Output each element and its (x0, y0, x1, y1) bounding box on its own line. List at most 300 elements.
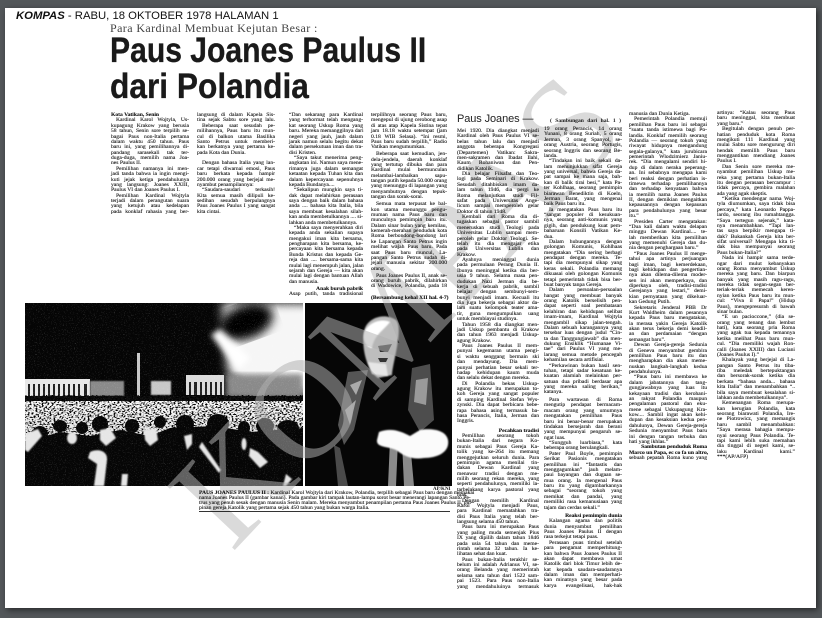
article column 7 (629, 111, 708, 461)
article column 6: golongan Komunis, Kohlhaas (544, 244, 622, 250)
article column 8: “E un pacioccone,” (dia se- (722, 314, 795, 320)
article column 7: nya akan dilema-dilema moder- (629, 272, 707, 278)
article column 6: “Tindakan ini baik sekali da- (549, 158, 622, 164)
article column 4: di atas atap Kapela Sistina tepat (371, 123, 447, 129)
article column 6: Jerman Barat, yang mengenal (544, 196, 622, 202)
article column 6: orang Austria, seorang Portugis, (544, 142, 622, 148)
article column 7: Presiden Carter mengatakan: (634, 218, 707, 224)
article column 5: meneruskan studi Teologi pada (457, 225, 539, 231)
article column 8: nyai seorang Paus Polandia. Te- (717, 432, 795, 438)
article column 6: baharuan Konsili Vatikan Ke- (544, 228, 622, 234)
article column 7: mene sebagai Uskupagung Kra- (629, 407, 707, 413)
article column 6: sebagai “seorang tokoh yang (544, 488, 622, 494)
article column 5: Kardinal oleh Paus Paulus VI se- (457, 133, 539, 139)
article column 3: lahkan anda membetulkannya. (289, 220, 357, 226)
article column 5: lam tahun 1946, dia pergi ke (457, 187, 539, 193)
article column 3: disi Kristen. (289, 150, 316, 156)
article column 6: keras sekali. Polandia memang (544, 266, 622, 272)
article column 6: dapat seperti soal pembatasan (544, 303, 622, 309)
article column 6: kan di balik tirai besi,” kata Pa- (544, 180, 622, 186)
continuation note: ( Sambungan dari hal. 1 ) (550, 118, 621, 124)
article column 5: Paus baru ini merupakan Paus (462, 524, 539, 530)
article column 8: berkata “bahasa anda... bahasa (717, 379, 795, 385)
article column 6: buat banyak tanpa Gereja. (544, 282, 602, 288)
article column 4: 0.18 WIB Selasa). “Ini resmi, (371, 134, 447, 140)
article column 5: anggota beberapa Kongregasi (457, 144, 539, 150)
article column 8: pangan Santo Petrus itu tiba- (717, 363, 795, 369)
article column 6: Dalam hubungannya dengan (549, 239, 622, 245)
article column 6: Jerman, 3 orang Spanyol, se- (544, 137, 622, 143)
article column 1: Pemilihan Kardinal Wojtyla (116, 193, 189, 199)
article column 5: Paus Joanes Paulus II mem- (462, 343, 539, 349)
article column 1: yang ketujuh atau kedelapan (111, 203, 189, 209)
article column 3: “Sekalipun mungkin saya ti- (294, 187, 363, 193)
article column 8: Dan Senin sore mereka me- (722, 164, 795, 170)
article column 7: pemilihan Paus baru itu dan (629, 353, 707, 359)
article column 4: yang menunggu di lapangan yang (371, 183, 447, 189)
article column 3: kat seorang Uskup Roma yang (289, 123, 363, 129)
article column 2: kan berkatnya yang pertama ke- (197, 144, 275, 150)
article column 2: pada Kota dan Dunia. (197, 150, 246, 156)
article column 6: Reaksi pemimpin dunia (565, 513, 622, 519)
article column 7: tahui apa artinya perjuangan (629, 256, 707, 262)
article column 3 (288, 112, 364, 297)
article column 7: itu.” (629, 213, 639, 219)
article column 6: baik Paus baru itu. (544, 201, 586, 207)
article column 8: ne Piotrowicz, yang memangis (717, 416, 795, 422)
article column 6: “sangat populer di kesukuan- (544, 212, 622, 218)
article column 5: koh Gereja yang sangat populer (457, 391, 539, 397)
article column 7: Gerejanya yang lestari,” demi- (629, 288, 707, 294)
article column 4: terpilihnya seorang Paus baru, (371, 112, 447, 118)
article column 7: kian pernyataan yang dikeluar- (629, 294, 707, 300)
article column 5: lam suatu kelompok teater ama- (457, 305, 539, 311)
article column 5: yang mendahuluinya termasuk (457, 584, 539, 590)
article column 6: pendapat dengan mereka. Te- (544, 255, 622, 261)
article column 6: baru itu yang digambarkannya (544, 483, 622, 489)
article column 3: rimanya juga dalam semangat (289, 166, 363, 172)
article column 7: dalam jabatannya dan tang- (629, 380, 707, 386)
article column 6: Ia mengatakan Paus baru itu (549, 207, 622, 213)
article column 3: pengharapan kita bersama, ke- (289, 241, 363, 247)
article column 1: kupagung Krakow yang berusia (111, 123, 189, 129)
article column 7: beri reaksi dengan perhatian is- (629, 176, 707, 182)
article column 5: Roma melanjutkan studi Fil- (457, 192, 539, 198)
article column 6: akan dapat membawa umat (544, 556, 622, 562)
article column 2: Paus Joanes Paulus I yang sangat (197, 203, 275, 209)
article column 2: sedihan sesudah berpulangnya (197, 198, 275, 204)
article column 8: mereka tidak segan-segan ber- (717, 282, 795, 288)
white fur cuffs (377, 429, 448, 459)
article column 6: imam-imam, Kardinal Wojtyla (544, 314, 622, 320)
photo caption: PAUS JOANES PAULUS II : Kardinal Karol Wojtyla dari Krakow, Polandia, terpilih sebagai Paus baru dengan memakai (199, 490, 474, 496)
article column 4: orang buruh pabrik, dilahirkan (371, 278, 447, 284)
article column 6: kuatan alamiah melainkan per- (544, 373, 622, 379)
kicker heading: Para Kardinal Membuat Kejutan Besar : (110, 21, 318, 35)
article column 6: menggagumkan” jauh melam- (544, 467, 622, 473)
article column 5: tarbelakang karya pastoral yang (457, 487, 539, 493)
article column 6: mengatakan “Dia sering berbagi (544, 250, 622, 256)
article column 8: sifat universal? Mengapa kita ti- (717, 239, 795, 245)
photo caption: nama Joanes Paulus II (gambar kanan). Pada gambar kiri tampak lautan-lampu sorot besar menerangi lapangan Santo Pe- (199, 495, 471, 501)
article column 8: dan bersorak-sorak ketika dia (717, 373, 795, 379)
article column 8: bila saya membuat kesalahan si- (717, 390, 795, 396)
article column 6: tapi dia mempunyai sikap yang (544, 260, 622, 266)
article column 8: kan kerugian Polandia, kata (717, 406, 795, 412)
article column 7: pemerintah Wlodzimierz Janiu- (629, 154, 707, 160)
article column 7: pendahulunya. (629, 369, 662, 375)
article column 4: Paus Joanes Paulus II, anak se- (376, 273, 447, 279)
article column 2: Beberapa saat sesudah pe- (202, 123, 275, 129)
article column 6: memikat dan pandai, yang (544, 494, 622, 500)
article column 6 (544, 126, 622, 589)
article column 7: di Geneva menyambut gembira (629, 348, 707, 354)
article column 5: Dia belajar Filsafat dan Teo- (462, 171, 539, 177)
article column 6: tae” dari Paulus VI yang me- (544, 346, 622, 352)
article column 5: dia juga bekerja sebagai aktor da- (457, 300, 539, 306)
article column 3: kepada Bundanya.... (289, 182, 335, 188)
article column 6: karya evangelisasi, hak-hak (544, 583, 622, 589)
article column 6: Para wartawan di Roma (549, 397, 622, 403)
article column 7: timewa terhadap pemilihannya (629, 181, 707, 187)
article column 7: an dan perdamaian “dengan (629, 331, 707, 337)
article column 8: tas saya berpikir mengapa ti- (717, 228, 795, 234)
article column 1: Pemilihan namanya ini men- (116, 166, 189, 172)
article column 8: yang baru.” (717, 121, 743, 127)
article column 6: Katolik dari blok Timur lebih de- (544, 561, 622, 567)
article column 3: Bunda Kristus dan kepada Ge- (289, 252, 363, 258)
article column 6: dukung Ensiklik “Humanae Vi- (544, 341, 622, 347)
article column 5: menawar tradisi dengan me- (457, 471, 539, 477)
article column 4: di Wadowice, Polandia, pada 18 (371, 283, 447, 289)
article column 3: dak dapat melahirkan perasaan (289, 193, 363, 199)
article column 5: untuk membiayai studinya. (457, 316, 518, 322)
article column 5: tugaskan sebagai pastor sambil (457, 219, 539, 225)
article column 7: Kurt Waldheim dalam pesannya (629, 310, 707, 316)
article column 8: nyian ketika Paus baru itu mun- (717, 293, 795, 299)
article column 5: para Kardinal mematahkan tra- (457, 508, 539, 514)
article column 8: tapi kami lebih suka memahan (717, 438, 795, 444)
article column 6: tetapi pemerintah tidak bisa ber- (544, 276, 622, 282)
article column 3: yang terhormat telah mengang- (289, 117, 363, 123)
article column 5: Di Polandia bekas Uskup- (462, 381, 539, 387)
article column 6: Kalangan agama dan politik (549, 518, 622, 524)
article column 6: Perasaan puas timbul setelah (549, 540, 622, 546)
article column 2: nyambut penampilannya: (197, 182, 254, 188)
article column 7: Sambutan penduduk Roma (641, 444, 707, 450)
article column 4: Paus baru sudah terpilih,” Radio (371, 139, 447, 145)
article column 7: dupan dan kesaksian kedua pen- (629, 417, 707, 423)
article column 5: usia 9 tahun. Selama masa pen- (457, 273, 539, 279)
article column 2: baru berkata kepada hampir (197, 171, 275, 177)
photo: crowd in Saint Peter's Square at night (25, 296, 320, 486)
article column 3: angkatan ini. Namun saya mene- (289, 160, 363, 166)
article column 3: mulai lagi dengan bantuan Allah (289, 273, 363, 279)
article column 7: akan terus bekerja demi keadil- (629, 326, 707, 332)
article column 4: tangan dan sorak-sorai. (371, 194, 423, 200)
article column 5: belajar dengan sembunyi-sem- (457, 289, 539, 295)
article column 6: Serikat Pasionis mengatakan (544, 456, 622, 462)
article column 5: zynski. Dia dapat berbicara bebe- (457, 402, 539, 408)
article column 4: (Bersambung kehal XII hal. 4-7) (371, 295, 449, 301)
article column 5: agung Krakow itu merupakan to- (457, 386, 539, 392)
article column 8: nyambut pemilihan Uskup me- (717, 169, 795, 175)
article column 8: baru meninggal, kita membuat (717, 115, 795, 121)
article column 7: an. Ini sebabnya mengapa kami (629, 170, 707, 176)
buildings, obelisk and plaza (25, 353, 303, 441)
article column 1: Kota Vatikan, Senin (111, 112, 159, 118)
article column 5: Paus bukan-Italia terakhir se- (462, 557, 539, 563)
article column 3: ketaatan kepada Tuhan kita dan (289, 171, 363, 177)
article column 8: dia tinggal di negeri kami, se- (717, 443, 795, 449)
article column 6: 19 orang Perancis, 14 orang (544, 126, 622, 132)
article column 7: “Paus Joanes Paulus II menge- (634, 251, 707, 257)
article column 7: an rakyat Polandia maupun (629, 396, 707, 402)
article column 5: Pemilihan seorang tokoh (462, 433, 539, 439)
article column 6: tersebar luas dengan judul “Cin- (544, 330, 622, 336)
article column 6: lam menunjukkan sifat Gereja (544, 164, 622, 170)
article column 7: yang memenuhi Gereja dan du- (629, 240, 707, 246)
watermark: KOMPAS: KOMPAS (140, 45, 652, 574)
article column 6: ngat luas. (544, 435, 565, 441)
article column 6: dunia menyambut pemilihan (544, 524, 622, 530)
article column 8: tiba meledak bertepuktangan (717, 368, 795, 374)
article column 7: Sedunia menyambut Paus baru (629, 428, 707, 434)
stoles and vestment (334, 364, 434, 486)
article column 7: dup di dalam neraka peperang- (629, 165, 707, 171)
article column 8: mereka yang baru. Dan biarpun (717, 271, 795, 277)
article column 6: dua. (544, 234, 553, 240)
article column 5: Dengan memilih Kardinal (462, 498, 539, 504)
article column 3: mulai lagi menempuh jalan, jalan (289, 262, 364, 268)
article column 7: kan Gedung Putih. (629, 299, 671, 305)
article column 1: bagai Paus non-Italia pertama (111, 134, 189, 140)
article column 4: menyambutnya dengan tepuk- (371, 189, 447, 195)
article column 6: tajam dan cerdas sekali.” (544, 505, 600, 511)
article column 7: landia. Konklaf memilih seorang (629, 132, 707, 138)
article column 1: pandang sarasekali tak ter- (111, 150, 189, 156)
article column 7: diperkaya oleh, tradisi-tradisi (629, 283, 707, 289)
article column 4: tangan putih kepada 50.000 orang (371, 178, 447, 184)
article column 8: tyla diumumkan, saya tidak bisa (717, 201, 795, 207)
article column 5: yang paling muda semenjak Pius (457, 530, 539, 536)
article column 6: paui bayangan dan dugaan se- (544, 472, 622, 478)
article column 5: bunyi menjadi imam. Kecuali itu (457, 295, 539, 301)
article column 6: nya, seorang anti-komunis yang (544, 217, 622, 223)
article column 8: ngar dari mulut kebanyakan (717, 260, 795, 266)
article column 5: logi pada Seminari di Krakow. (457, 176, 539, 182)
article column 6: mengambil sikap jalan-tengah. (544, 320, 622, 326)
article column 4: Kardinal mulai bermunculan (371, 167, 447, 173)
article column 6: katanya. (544, 389, 563, 395)
article column 5: Sesudah ditahbiskan imam da- (457, 182, 539, 188)
article column 2: langsung di dalam Kapela Sis- (197, 112, 275, 118)
article column 3: kan anda membetulkannya .... si- (289, 214, 363, 220)
article column 2: “Saudara-saudari terkasih! (202, 187, 275, 193)
article column 7: “Paus baru ini membawa ke (634, 374, 707, 380)
article column 3: negeri yang jauh, jauh dalam (289, 134, 363, 140)
article column 8: lahkan anda membetulkannya”. (717, 395, 788, 401)
article column 5: Krakow. (457, 252, 476, 258)
article column 6: yang mempunyai pengaruh se- (544, 429, 622, 435)
article column 8: artinya: “Kalau seorang Paus (717, 110, 795, 116)
article column 5: rapa bahasa asing termasuk ba- (457, 408, 539, 414)
article column 7: pengalaman pastoral dan eku- (629, 401, 707, 407)
article column 7: lah memberikan kita pemilihan (629, 235, 707, 241)
article column 7: para pendahulunya yang besar (629, 208, 707, 214)
article column 7: Polandia — seorang tokoh yang (629, 138, 707, 144)
article column 5: pemimpin agama menilai tin- (457, 460, 539, 466)
article column 2: Dengan bahasa Italia yang lan- (202, 160, 275, 166)
article column 7: ini dengan tangan terbuka dan (629, 434, 707, 440)
article column 1: nes Paulus II. (111, 160, 141, 166)
article column 4: kemerah-merahan penduduk kota (371, 228, 447, 234)
article column 4: jejali manusia sekitar 200.000 (371, 260, 447, 266)
article column 5: peroleh gelar Doktor Teologi. Se- (457, 236, 539, 242)
article column 5: pada Universitas Lublin dan (457, 246, 539, 252)
article column 6: mengutip pendapat bermacam- (544, 402, 622, 408)
photo caption: pinan gereja Katolik yang pertama sejak 450 tahun yang bukan warga Italia. (199, 505, 369, 511)
article column 5: pada permulaan Perang Dunia II. (457, 262, 539, 268)
article column 2 (197, 112, 276, 215)
article column 5: dan tahun 1963 menjadi Uskup- (457, 332, 539, 338)
article column 4: dela-jendela, daerah konklaf (371, 157, 447, 163)
article column 8: Khalayak yang berjejal di La- (722, 357, 795, 363)
article column 7: bagi kehidupan dan pengertian- (629, 267, 707, 273)
article column 5: seperti pendahulunya, memiliki la- (457, 481, 539, 487)
article column 6: hangat yang membuat banyak (544, 293, 622, 299)
article column 8: “Ketika mendengar nama Woj- (722, 196, 795, 202)
article column 7: dahulunya, Dewan Gereja-gereja (629, 423, 707, 429)
article column 5: hasa Perancis, Italia, Jerman dan (457, 413, 539, 419)
article column 8: nya menambahkan. “Tapi lan- (717, 223, 795, 229)
article column 4: mengepul di ujung cerobong asap (371, 117, 447, 123)
article column 2: car tetapi diwarnai emosi, Paus (197, 166, 275, 172)
article column 3: mengakui iman kita bersama, (289, 236, 363, 242)
article column 5: Ibunya meninggal ketika dia ber- (457, 268, 539, 274)
article column 6: “Perkawinan bukan hasil sen- (549, 362, 622, 368)
article column 6: pemilihan ini “fantastis dan (544, 462, 622, 468)
article column 4: kon utama menunggu pengu- (371, 207, 447, 213)
article column 3: “Dan sekarang para Kardinal (289, 112, 363, 118)
article column 2: Kita semua masih dilipuli ke- (197, 193, 275, 199)
article column 5: tolik yang ke-264 itu memang (457, 449, 539, 455)
article column 5: munis sebagai Paus Gereja Ka- (457, 444, 539, 450)
article column 8: “Saya merasa bahagia mempu- (717, 427, 795, 433)
main headline: dari Polandia (110, 67, 309, 106)
article column 5: belum ini adalah Adrianus VI, se- (457, 562, 539, 568)
newspaper source line: KOMPAS - RABU, 18 OKTOBER 1978 HALAMAN 1 (16, 10, 279, 22)
article column 7: kepada Paus baru mengatakan, (629, 315, 707, 321)
article column 5: langsung selama 450 tahun. (457, 519, 519, 525)
article column 8: tidak percaya, gembira malahan (717, 185, 795, 191)
article column 7: dan terhadap kenyataan bahwa (629, 186, 707, 192)
article column 1: kuti jejak ketiga pendahulunya (111, 176, 189, 182)
article column 5: (Departemen) Vatikan: Sakra- (457, 150, 539, 156)
article column 3: reja dan .... bersama-sama kita (289, 257, 363, 263)
article column 1: yang langsung: Joanes XXIII, (111, 182, 189, 188)
article column 8: cul: “Viva il Papa!” (Hidup (717, 298, 795, 304)
photo caption: trus yang penuh sesak dengan manusia Senin malam. Mereka menyambut penampilan pertama Paus Joanes Paulus II, pin- (199, 500, 473, 506)
article column 5: menggejutkan seluruh dunia. Para (457, 454, 539, 460)
article column 2: Santo Petrus untuk memberi- (197, 139, 275, 145)
article column 1: dalam waktu 450 tahun. Paus (111, 139, 189, 145)
article column 5: telah itu dia mengajar etika (457, 241, 539, 247)
article column 5: dan mendayung. Dia mem- (457, 359, 539, 365)
article column 6: seorang Inggris dan seorang Be- (544, 148, 622, 154)
article column 7: sebuah pepatah Roma kuno yang (629, 455, 707, 461)
article column 8 (717, 110, 795, 460)
article column 7: “Dua kali dalam waktu delapan (629, 224, 707, 230)
photo caption (199, 490, 474, 511)
article column 4: Beberapa saat kemudian, jen- (376, 151, 447, 157)
article column 3: baru. Mereka memanggilnya dari (289, 128, 364, 134)
article column 7: minggu Dewan Kardinal.... te- (629, 229, 707, 235)
article column 6: yang mereka saling berikan,” (544, 384, 622, 390)
article column 8: Paus bukan-Italia?” (717, 250, 761, 256)
article column 5: si waktu senggang bermain ski (457, 354, 539, 360)
article column 7: kepausannya dengan kepausan (629, 202, 707, 208)
article column 7: rek. “Dia mengalami sendiri hi- (629, 159, 707, 165)
article column 8: laku Kardinal kami.” (717, 449, 795, 455)
article column 7: ia merasa yakin Gereja Katolik (629, 321, 707, 327)
article column 3: jarak namun selalu begitu dekat (289, 139, 363, 145)
article column 3: “Saya takut menerima peng- (294, 155, 363, 161)
article column 7: Sekretaris Jenderal PBB Dr (634, 304, 707, 310)
continuation heading: Paus Joanes — (457, 113, 533, 125)
article column 2: kita cintai. (197, 209, 221, 215)
article column 5: Kembali dari Roma dia di- (462, 214, 539, 220)
article column 5: Tahun 1958 dia diangkat men- (462, 322, 539, 328)
article column 6: Paus Joanes Paulus II dengan (544, 529, 622, 535)
article column 3: dalam kepercayaan sepenuhnya (289, 176, 363, 182)
article column 6: ter Kohlhaas, seorang pemimpin (544, 185, 622, 191)
article column 5: jadi Uskup pembantu di Krakow (457, 327, 539, 333)
article column 6: larang semua metode pencegah (544, 352, 622, 358)
article column 6: kan bahwa Paus Joanes Paulus II (544, 551, 622, 557)
article column 5: luas. (457, 492, 467, 498)
article column 7: “suatu tanda istimewa bagi Po- (629, 127, 707, 133)
article column 8: ketika melihat Paus baru mun- (717, 336, 795, 342)
article column 1 (110, 112, 189, 215)
article column 8: teriak-teriak memecah keren- (717, 287, 795, 293)
article column 3: Anak buruh pabrik (316, 286, 363, 292)
article column 3: kepada anda sekalian supaya (289, 230, 363, 236)
article column 5: milih seorang rekan mereka, yang (457, 476, 539, 482)
article column 8: Paus), mengepresurah di bawah (717, 304, 795, 310)
article column 7: riwayat hidupnya mengandung (629, 143, 707, 149)
article column 8: orang Roma menyambut Uskup (717, 266, 795, 272)
article column 5: didikan Katolik. (457, 166, 493, 172)
article column 1: baru ini, yang pemilihannya di- (111, 144, 189, 150)
article column 6: kelahiran dan kehidupan selibat (544, 309, 622, 315)
article column 4: Roma berbondong-bondong lari (371, 233, 447, 239)
article column 8: calli (Joanes XXIII) dan Luciani (717, 346, 795, 352)
article column 6: “Sungguh luarbiasa,” kata (549, 440, 622, 446)
article column 8: Begitulah dengan penuh per- (722, 126, 795, 132)
photo: portrait of Pope John Paul II (305, 303, 452, 486)
article column 5: punyai perhatian besar sekali ter- (457, 364, 539, 370)
article column 6: landa. (544, 153, 558, 159)
article column 1: duga-duga, memilih nama Joa- (111, 155, 189, 161)
article column 6: kehamilan secara artifisial. (544, 357, 604, 363)
article column 4: saat Paus baru muncul, La- (371, 250, 447, 256)
head and face (363, 316, 399, 378)
article column 8: Kemenangan Roma merupa- (722, 400, 795, 406)
article column 5: dakan Dewan Kardinal yang (457, 465, 539, 471)
article column 5: Inggris. (457, 418, 474, 424)
article column 3: saya dengan baik dalam bahasa (289, 198, 363, 204)
